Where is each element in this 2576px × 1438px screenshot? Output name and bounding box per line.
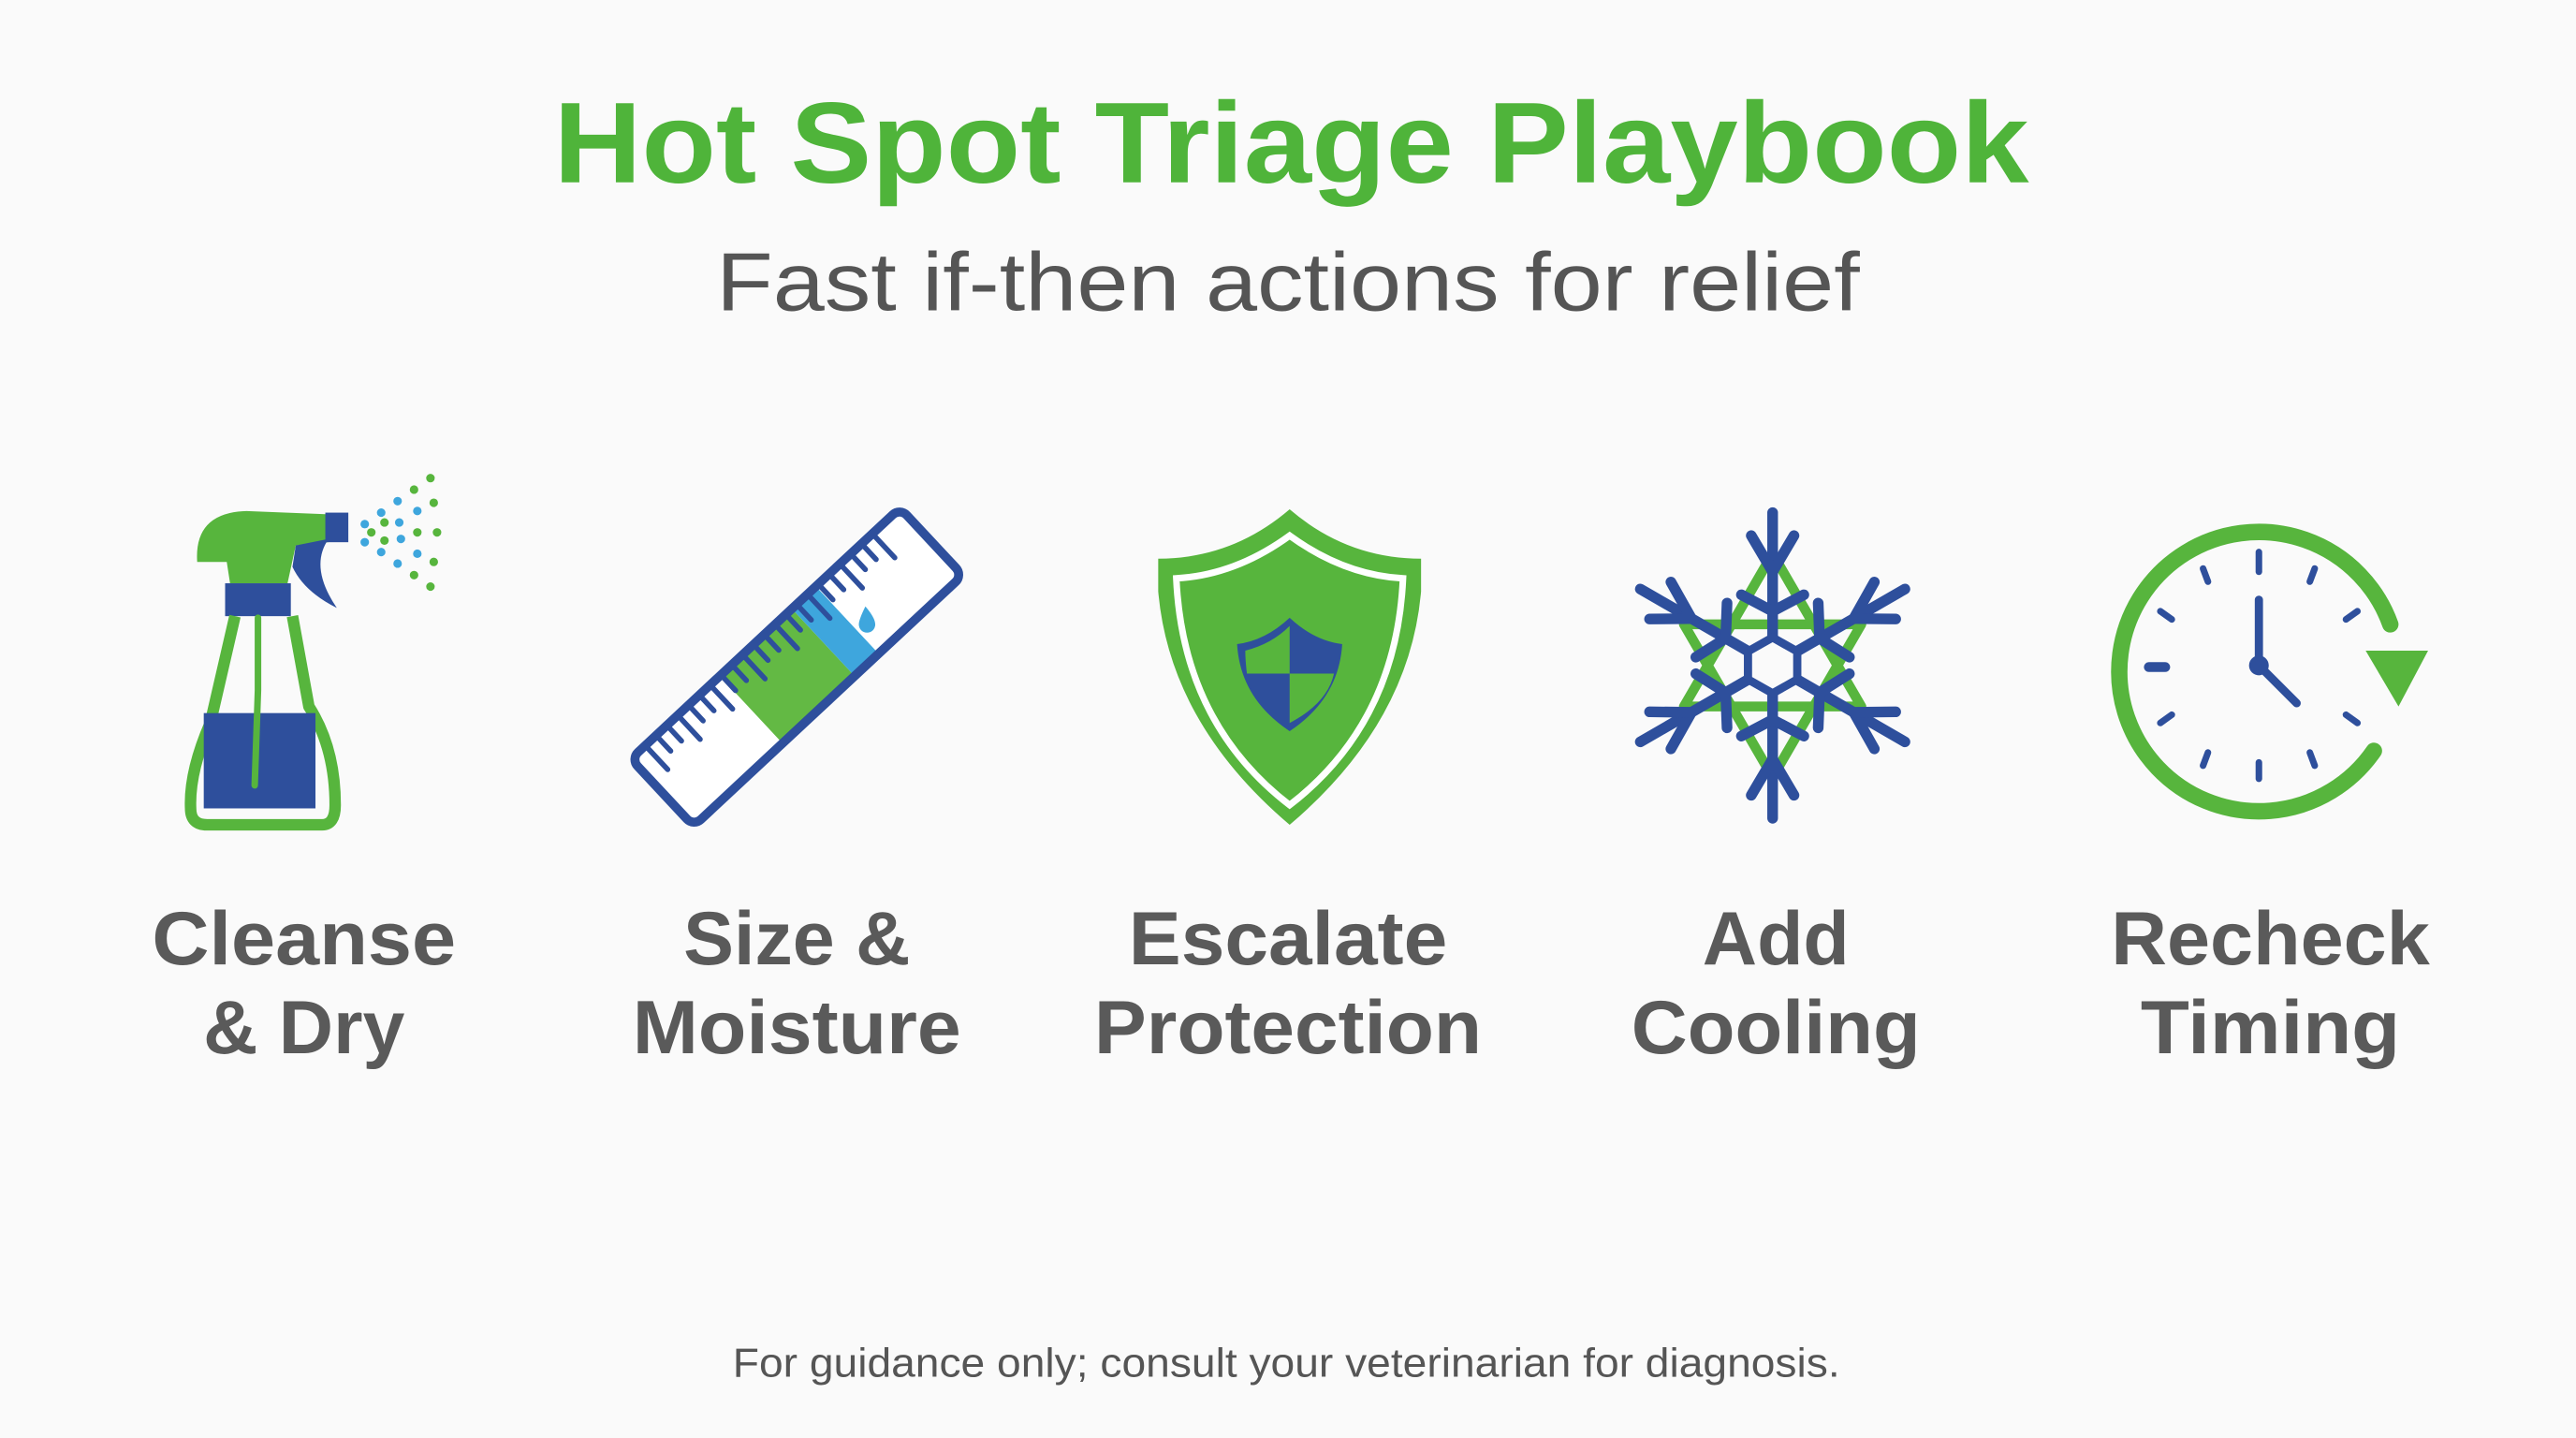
- icon: ruler: [631, 508, 963, 827]
- icon: shield: [1158, 509, 1421, 825]
- title: Hot Spot Triage Playbook: [554, 80, 2029, 208]
- icon: spray bottle: [191, 474, 441, 825]
- footer disclaimer: For guidance only; consult your veterinarian for diagnosis.: [733, 1341, 1840, 1387]
- label: Recheck Timing: Timing: [2141, 986, 2400, 1070]
- label: Add Cooling: [1632, 897, 1921, 1070]
- label: Size & Moisture: Size &: [683, 897, 910, 981]
- label: Escalate Protection: Protection: [1094, 986, 1482, 1070]
- label: Cleanse & Dry: Cleanse: [152, 897, 456, 981]
- label: Add Cooling: Add: [1703, 897, 1850, 981]
- subtitle: Fast if-then actions for relief: [716, 237, 1860, 329]
- label: Escalate Protection: Escalate: [1129, 897, 1447, 981]
- label: Size & Moisture: Moisture: [633, 986, 961, 1070]
- label: Size & Moisture: [633, 897, 961, 1070]
- label: Escalate Protection: [1094, 897, 1482, 1070]
- label: Add Cooling: Cooling: [1632, 986, 1921, 1070]
- label: Cleanse & Dry: & Dry: [203, 986, 404, 1070]
- icon: clock: [2119, 532, 2428, 812]
- label: Recheck Timing: [2111, 897, 2430, 1070]
- icon: snowflake: [1625, 513, 1921, 818]
- label: Recheck Timing: Recheck: [2111, 897, 2430, 981]
- label: Cleanse & Dry: [152, 897, 456, 1070]
